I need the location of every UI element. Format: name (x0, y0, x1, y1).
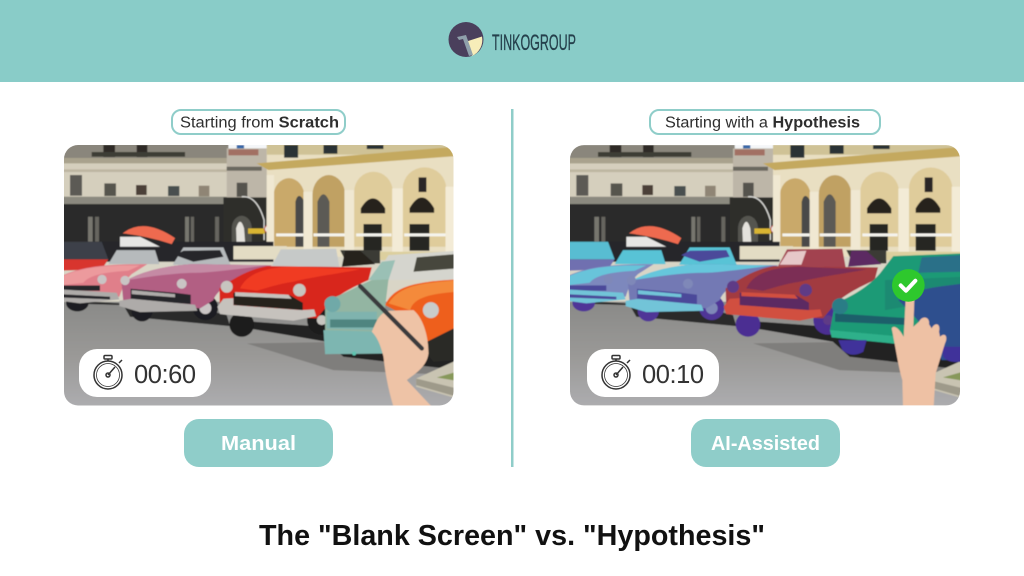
timer: 00:60 (79, 349, 211, 397)
panel: manual (60, 110, 460, 410)
header band (0, 0, 1024, 82)
logo: Tinkogroup (448, 22, 576, 57)
logo icon (448, 22, 484, 57)
title: The "Blank Screen" vs. "Hypothesis" (259, 520, 765, 552)
button: AI-assisted (691, 419, 840, 467)
button: manual (184, 419, 333, 467)
panel: AI-assisted (566, 110, 966, 410)
timer: 00:10 (587, 349, 719, 397)
button: manual: Manual (221, 433, 296, 455)
logo wordmark: TINKOGROUP (492, 30, 576, 55)
button: AI-assisted: AI-Assisted (711, 433, 820, 455)
divider (511, 109, 514, 467)
icon: green check badge (892, 269, 925, 302)
label: starting from scratch (172, 110, 345, 134)
timer: 00:60: 00:60 (134, 361, 196, 389)
icon: stopwatch (94, 356, 122, 389)
label: starting from scratch: Starting from Scratch (180, 114, 339, 132)
photo: AI-segmented vintage cars (570, 145, 960, 406)
label: starting with a hypothesis (650, 110, 880, 134)
timer: 00:10: 00:10 (642, 361, 704, 389)
photo: manually annotated vintage cars (64, 145, 454, 406)
label: starting with a hypothesis: Starting with a Hypothesis (665, 114, 860, 132)
icon: stopwatch (602, 356, 630, 389)
